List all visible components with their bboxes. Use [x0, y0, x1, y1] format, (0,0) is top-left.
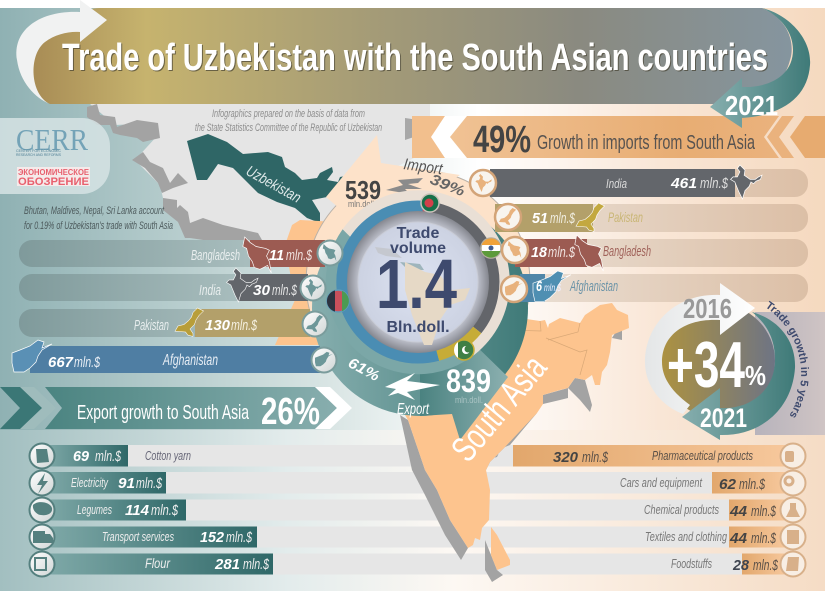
row: Bangladesh export — [19, 237, 342, 273]
panel: trade growth in 5 years — [645, 283, 825, 440]
panel: import growth banner — [412, 116, 825, 161]
row: Pakistan — [495, 203, 808, 232]
flag: Bangladesh — [421, 194, 439, 212]
import sector: 39% — [428, 171, 467, 200]
text: note on other countries: for 0.19% of Uzbekistan's trade with South Asia — [24, 220, 173, 232]
row: Pakistan: 51 — [532, 210, 548, 227]
row: pharmaceutical products: mln.$ — [582, 449, 608, 466]
row: pharmaceutical products: Pharmaceutical products — [652, 448, 753, 463]
row: Afghanistan export: 667 — [48, 354, 74, 371]
panel: logos: RESEARCH AND REFORMS — [16, 152, 61, 157]
row: flour: mln.$ — [243, 556, 269, 573]
row: Pakistan: mln.$ — [550, 210, 575, 227]
arrow: teal curve with year 2021 — [710, 8, 810, 128]
row: legumes: 114 — [125, 502, 150, 519]
row: India export: India — [199, 282, 221, 299]
row: Afghanistan — [501, 271, 808, 302]
row: Bangladesh export: mln.$ — [286, 247, 312, 264]
row: Bangladesh: mln.$ — [548, 244, 575, 261]
row: cars and equipment: mln.$ — [739, 476, 765, 493]
arrow: 2021 — [682, 312, 795, 440]
panel: trade growth in 5 years: +34 — [667, 328, 745, 401]
chart: exports by country — [12, 237, 342, 373]
panel: logos: CERR — [16, 122, 88, 157]
heading: trade volume: volume — [390, 240, 446, 257]
map: Uzbekistan: Uzbekistan — [243, 163, 304, 207]
text: source note: the State Statistics Committee of the Republic of Uzbekistan — [195, 122, 382, 134]
mini map — [375, 247, 470, 345]
row: flour: Flour — [145, 555, 171, 571]
row: India export: 30 — [253, 282, 271, 299]
row: Pakistan export: Pakistan — [134, 317, 169, 334]
row: chemical products: Chemical products — [644, 502, 719, 517]
row: Bangladesh export: 11 — [269, 247, 284, 264]
import sector: Import — [402, 156, 444, 178]
row: Afghanistan: mln.$ — [544, 283, 561, 294]
row: legumes — [30, 498, 186, 522]
export sector: Export — [397, 401, 429, 418]
row: textiles and clothing — [645, 524, 806, 550]
row: cotton yarn: Cotton yarn — [145, 448, 191, 463]
import sector — [306, 135, 530, 394]
text: note on other countries — [24, 205, 173, 232]
panel: logos: CENTER FOR ECONOMIC — [16, 148, 61, 153]
row: Afghanistan export: mln.$ — [74, 354, 100, 371]
row: chemical products: 44 — [729, 503, 748, 520]
chart: imports by country — [470, 165, 808, 302]
row: India: mln.$ — [700, 175, 728, 192]
chart: export goods — [30, 444, 273, 576]
panel: logos: ОБОЗРЕНИЕ — [18, 176, 89, 188]
row: flour: 281 — [214, 556, 240, 573]
row: Pakistan: Pakistan — [608, 209, 643, 225]
row: cotton yarn — [30, 444, 191, 468]
row: cotton yarn: mln.$ — [95, 448, 121, 465]
panel: logos — [0, 118, 110, 194]
row: Pakistan export: mln.$ — [231, 317, 257, 334]
row: pharmaceutical products — [513, 444, 806, 468]
row: Bangladesh export: Bangladesh — [191, 247, 240, 264]
arrow: 2016 — [645, 283, 755, 414]
panel: logos: ЭКОНОМИЧЕСКОЕ — [18, 168, 90, 177]
text: source note — [195, 108, 382, 134]
row: chemical products — [644, 498, 806, 522]
row: Bangladesh: Bangladesh — [603, 243, 651, 260]
row: foodstuffs: Foodstuffs — [671, 556, 712, 571]
row: cars and equipment: Cars and equipment — [620, 475, 703, 490]
map: central Asia neighbours — [87, 104, 450, 244]
map: Uzbekistan — [187, 134, 350, 223]
row: Afghanistan export — [12, 340, 336, 373]
heading: South Asia: South Asia — [443, 346, 555, 469]
row: electricity: 91 — [118, 475, 135, 492]
row: India export — [19, 268, 326, 302]
row: India export: mln.$ — [272, 282, 297, 299]
row: Pakistan export — [19, 308, 328, 337]
row: India — [470, 165, 808, 199]
panel: import growth banner: 49% — [473, 119, 531, 161]
row: Afghanistan: 6 — [536, 278, 542, 295]
panel: trade growth in 5 years: % — [745, 360, 766, 391]
map: South Asia — [275, 215, 629, 582]
chart: import goods — [513, 444, 806, 576]
export sector: 839 — [446, 363, 491, 399]
panel: trade growth in 5 years: 2016 — [683, 293, 732, 324]
heading: trade volume: Trade — [397, 225, 439, 242]
row: cotton yarn: 69 — [73, 448, 90, 465]
export sector — [312, 190, 528, 440]
export rows background — [128, 445, 785, 574]
row: electricity — [30, 470, 166, 496]
panel: trade growth in 5 years: 2021 — [700, 403, 747, 433]
row: textiles and clothing: Textiles and clothing — [645, 529, 728, 544]
heading: trade volume — [376, 225, 457, 336]
arrow: white curve — [16, 0, 107, 104]
import sector: mln.doll. — [348, 199, 376, 209]
map shadow — [400, 328, 622, 582]
row: transport services: mln.$ — [226, 529, 252, 546]
row: transport services: Transport services — [102, 529, 174, 544]
row: Bangladesh — [502, 235, 808, 271]
row: pharmaceutical products: 320 — [553, 449, 579, 466]
row: Afghanistan: Afghanistan — [569, 278, 618, 295]
row: cars and equipment — [620, 470, 806, 496]
row: flour — [30, 552, 273, 576]
row: electricity: mln.$ — [136, 475, 162, 492]
heading: trade volume: Bln.doll. — [386, 319, 450, 336]
row: legumes: Legumes — [77, 502, 112, 517]
row: electricity: Electricity — [71, 475, 109, 490]
row: foodstuffs: mln.$ — [753, 557, 778, 574]
flag: India — [481, 238, 501, 258]
flag: Pakistan — [454, 340, 474, 360]
ring arcs — [342, 206, 494, 358]
row: India: India — [606, 176, 627, 191]
panel: trade growth in 5 years: Trade growth in 5 years — [767, 300, 809, 418]
import sector: 539 — [345, 175, 381, 205]
heading: trade volume: 1.4 — [376, 245, 457, 323]
panel: export growth banner: 26% — [261, 391, 320, 433]
row: Bangladesh: 18 — [531, 244, 548, 261]
icon: import feather arrow — [386, 178, 423, 194]
row: foodstuffs: 28 — [732, 557, 750, 574]
row: transport services — [30, 524, 257, 550]
text: note on other countries: Bhutan, Maldives, Nepal, Sri Lanka account — [24, 205, 165, 217]
row: transport services: 152 — [200, 529, 225, 546]
row: legumes: mln.$ — [151, 502, 178, 519]
Sri Lanka — [491, 527, 510, 570]
title banner — [16, 0, 792, 104]
flag: Afghanistan — [327, 290, 349, 312]
row: chemical products: mln.$ — [751, 503, 776, 520]
row: textiles and clothing: 44 — [729, 530, 748, 547]
row: Afghanistan export: Afghanistan — [162, 352, 218, 369]
arrow: teal curve with year 2021: 2021 — [725, 90, 778, 121]
row: Pakistan export: 130 — [205, 317, 231, 334]
panel: export growth banner: Export growth to South Asia — [77, 402, 250, 424]
row: foodstuffs — [671, 552, 806, 576]
export sector: 61% — [345, 355, 382, 385]
panel: export growth banner — [0, 387, 352, 433]
row: textiles and clothing: mln.$ — [751, 530, 776, 547]
text: source note: Infographics prepared on the basis of data from — [212, 108, 365, 120]
row: cars and equipment: 62 — [719, 476, 737, 493]
export sector: mln.doll. — [455, 395, 483, 405]
trade ring — [306, 135, 530, 440]
row: India: 461 — [670, 175, 697, 192]
